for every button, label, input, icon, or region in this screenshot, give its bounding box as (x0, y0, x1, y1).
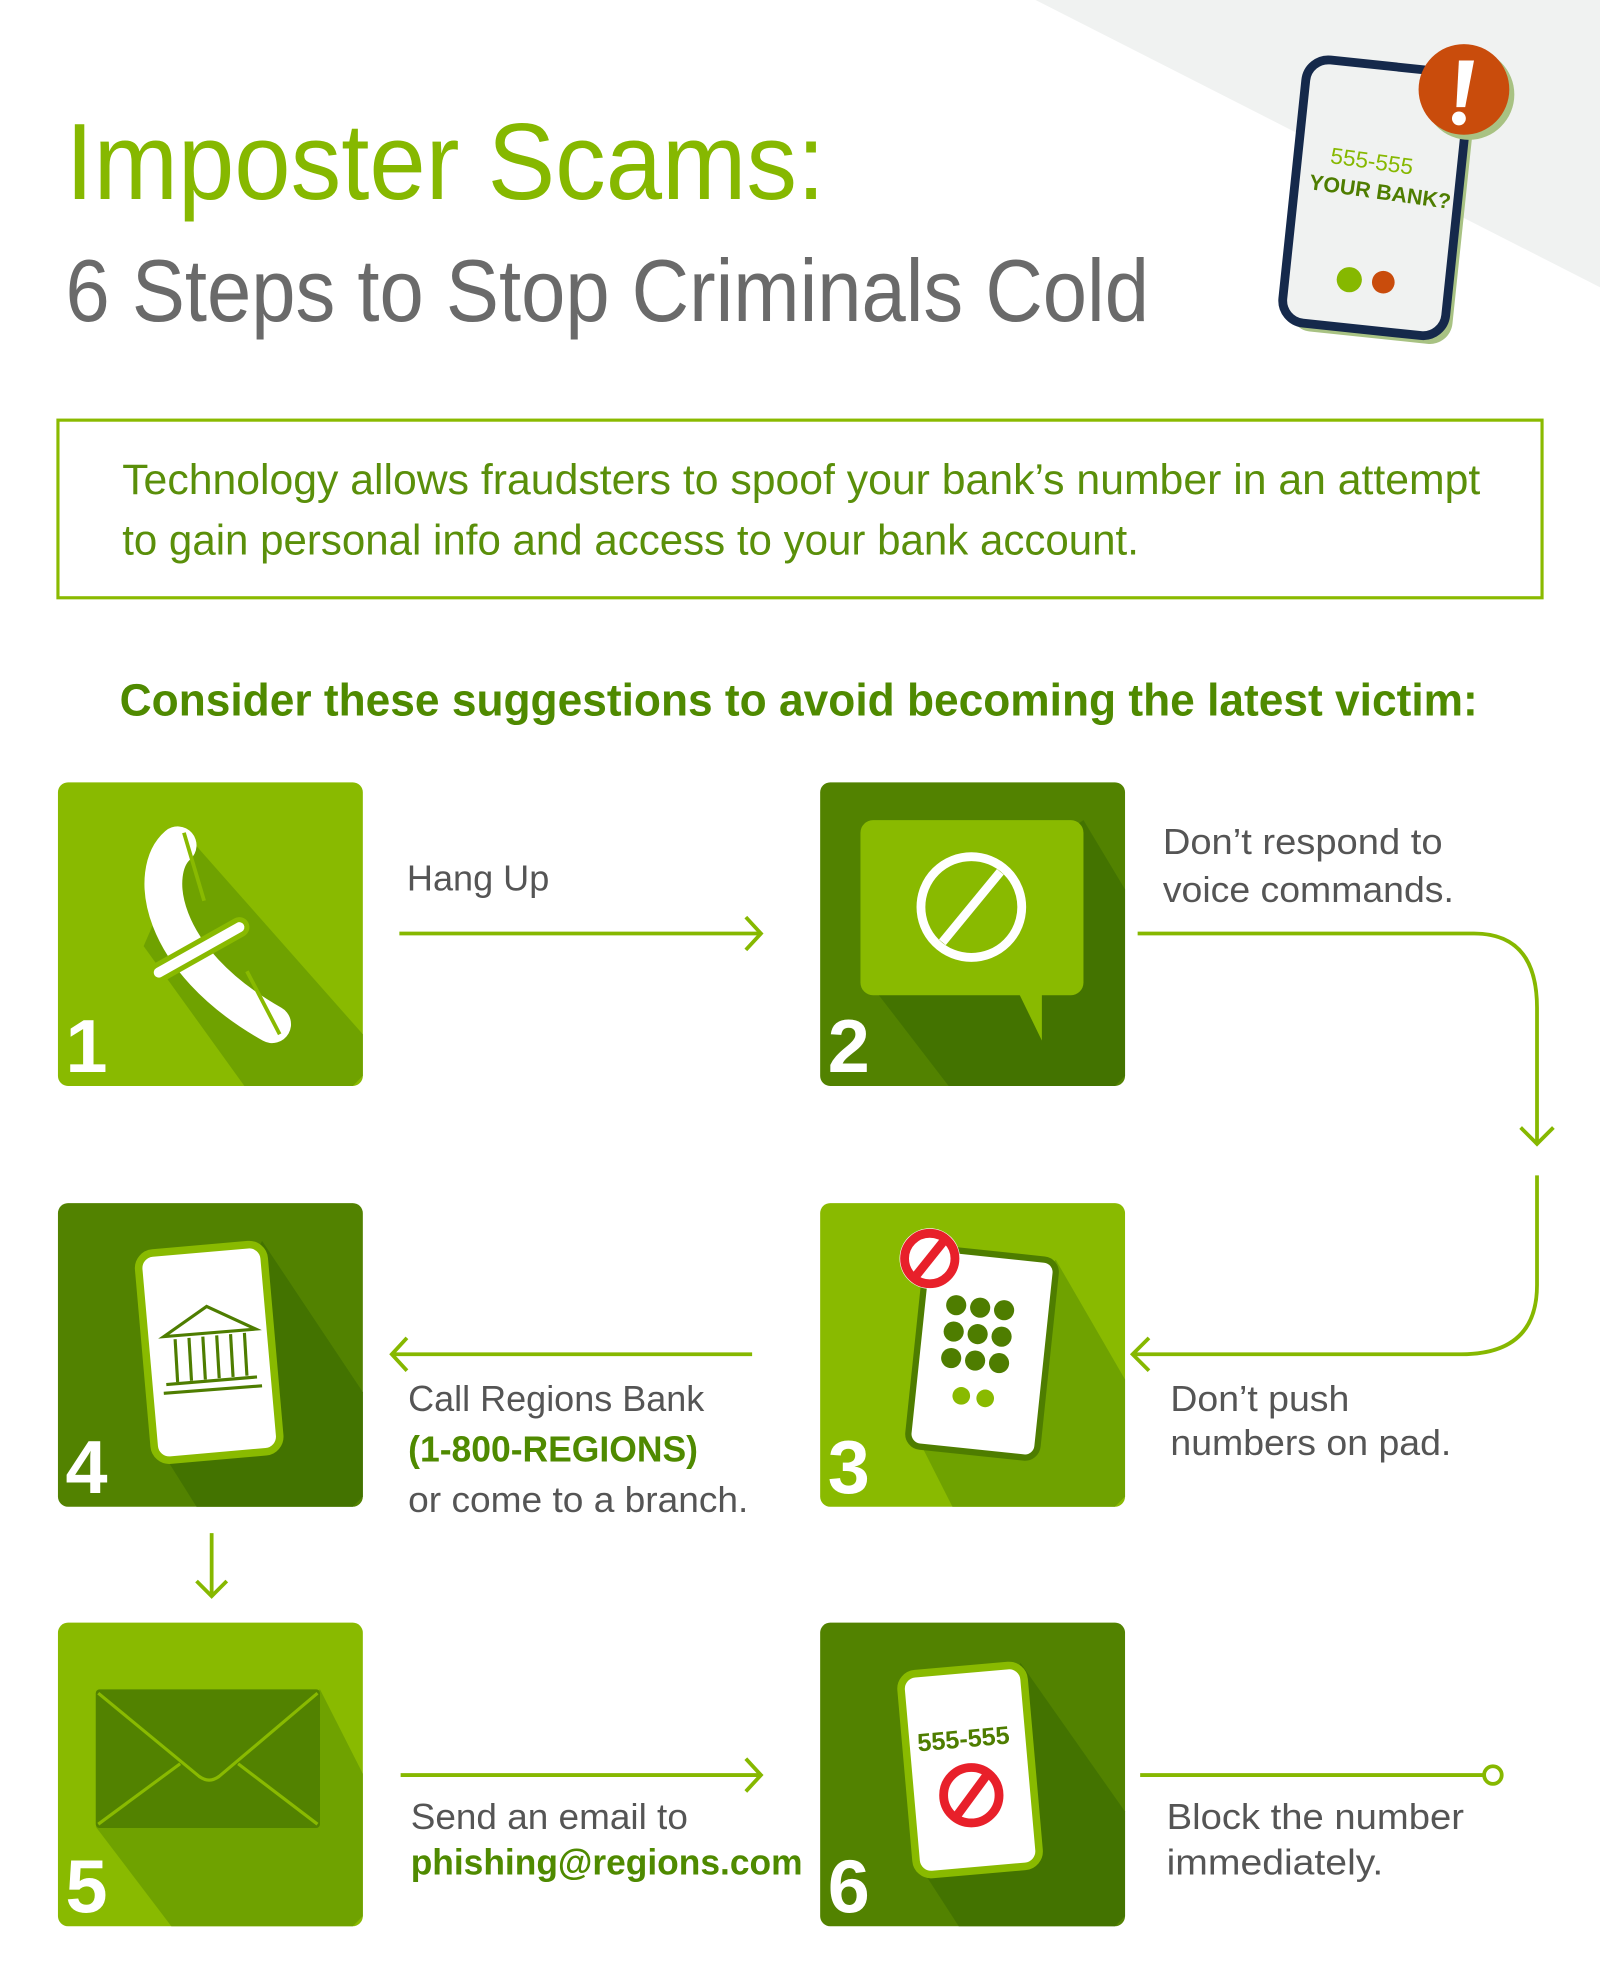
step 5 text: Send an email to (411, 1796, 688, 1837)
step 4 text: or come to a branch. (408, 1479, 748, 1520)
arrow 4 to 5 (197, 1533, 227, 1596)
heading: Consider these suggestions to avoid becoming the latest victim: (120, 675, 1478, 726)
tile 3: keypad: 3 (828, 1426, 870, 1510)
intro box (58, 420, 1542, 598)
tile 5: envelope (58, 1623, 363, 1929)
tile 5: envelope: 5 (66, 1845, 108, 1929)
tile 6: block number (820, 1623, 1125, 1929)
arrow 5 to 6 (401, 1759, 761, 1791)
arrow 1 to 2 (399, 917, 761, 950)
step 4 text: (1-800-REGIONS) (408, 1428, 698, 1469)
step 3 text: Don’t push (1170, 1378, 1349, 1419)
tile 1: hang up (58, 782, 363, 1089)
step 6 text: Block the number (1167, 1796, 1464, 1837)
step 1 text: Hang Up (407, 858, 549, 899)
step 3 text: numbers on pad. (1170, 1422, 1451, 1463)
icon: header phone alert (1280, 44, 1514, 346)
step 2 text: Don’t respond to (1163, 821, 1443, 862)
step 4 text (408, 1378, 748, 1520)
step 3 text (1170, 1378, 1451, 1463)
intro box: Technology allows fraudsters to spoof your bank’s number in an attempt (122, 456, 1480, 504)
tile 6: block number: 6 (828, 1845, 870, 1929)
icon: header phone alert: 555-555 (1329, 142, 1415, 180)
intro box: to gain personal info and access to your bank account. (122, 516, 1139, 564)
step 2 text: voice commands. (1163, 869, 1454, 910)
step 5 text: phishing@regions.com (411, 1842, 803, 1883)
tile 4: bank phone (58, 1203, 363, 1510)
step 6 text: immediately. (1167, 1842, 1383, 1883)
background triangle (1036, 0, 1600, 287)
arrow 3 to 4 (392, 1338, 752, 1371)
tile 2: voice commands (820, 782, 1125, 1089)
tile 2: voice commands: 2 (828, 1005, 870, 1089)
title: Imposter Scams: (66, 101, 825, 222)
arrow 2 to 3 (1133, 934, 1553, 1371)
step 5 text (411, 1796, 803, 1883)
tile 6: block number: 555-555 (916, 1722, 1011, 1757)
tile 3: keypad (820, 1203, 1125, 1510)
step 4 text: Call Regions Bank (408, 1378, 705, 1419)
step 2 text (1163, 821, 1454, 910)
icon: header phone alert: YOUR BANK? (1308, 170, 1452, 214)
end line with circle (1140, 1766, 1502, 1784)
subtitle: 6 Steps to Stop Criminals Cold (66, 241, 1149, 340)
tile 1: hang up: 1 (66, 1005, 108, 1089)
step 6 text (1167, 1796, 1464, 1883)
tile 4: bank phone: 4 (66, 1426, 108, 1510)
